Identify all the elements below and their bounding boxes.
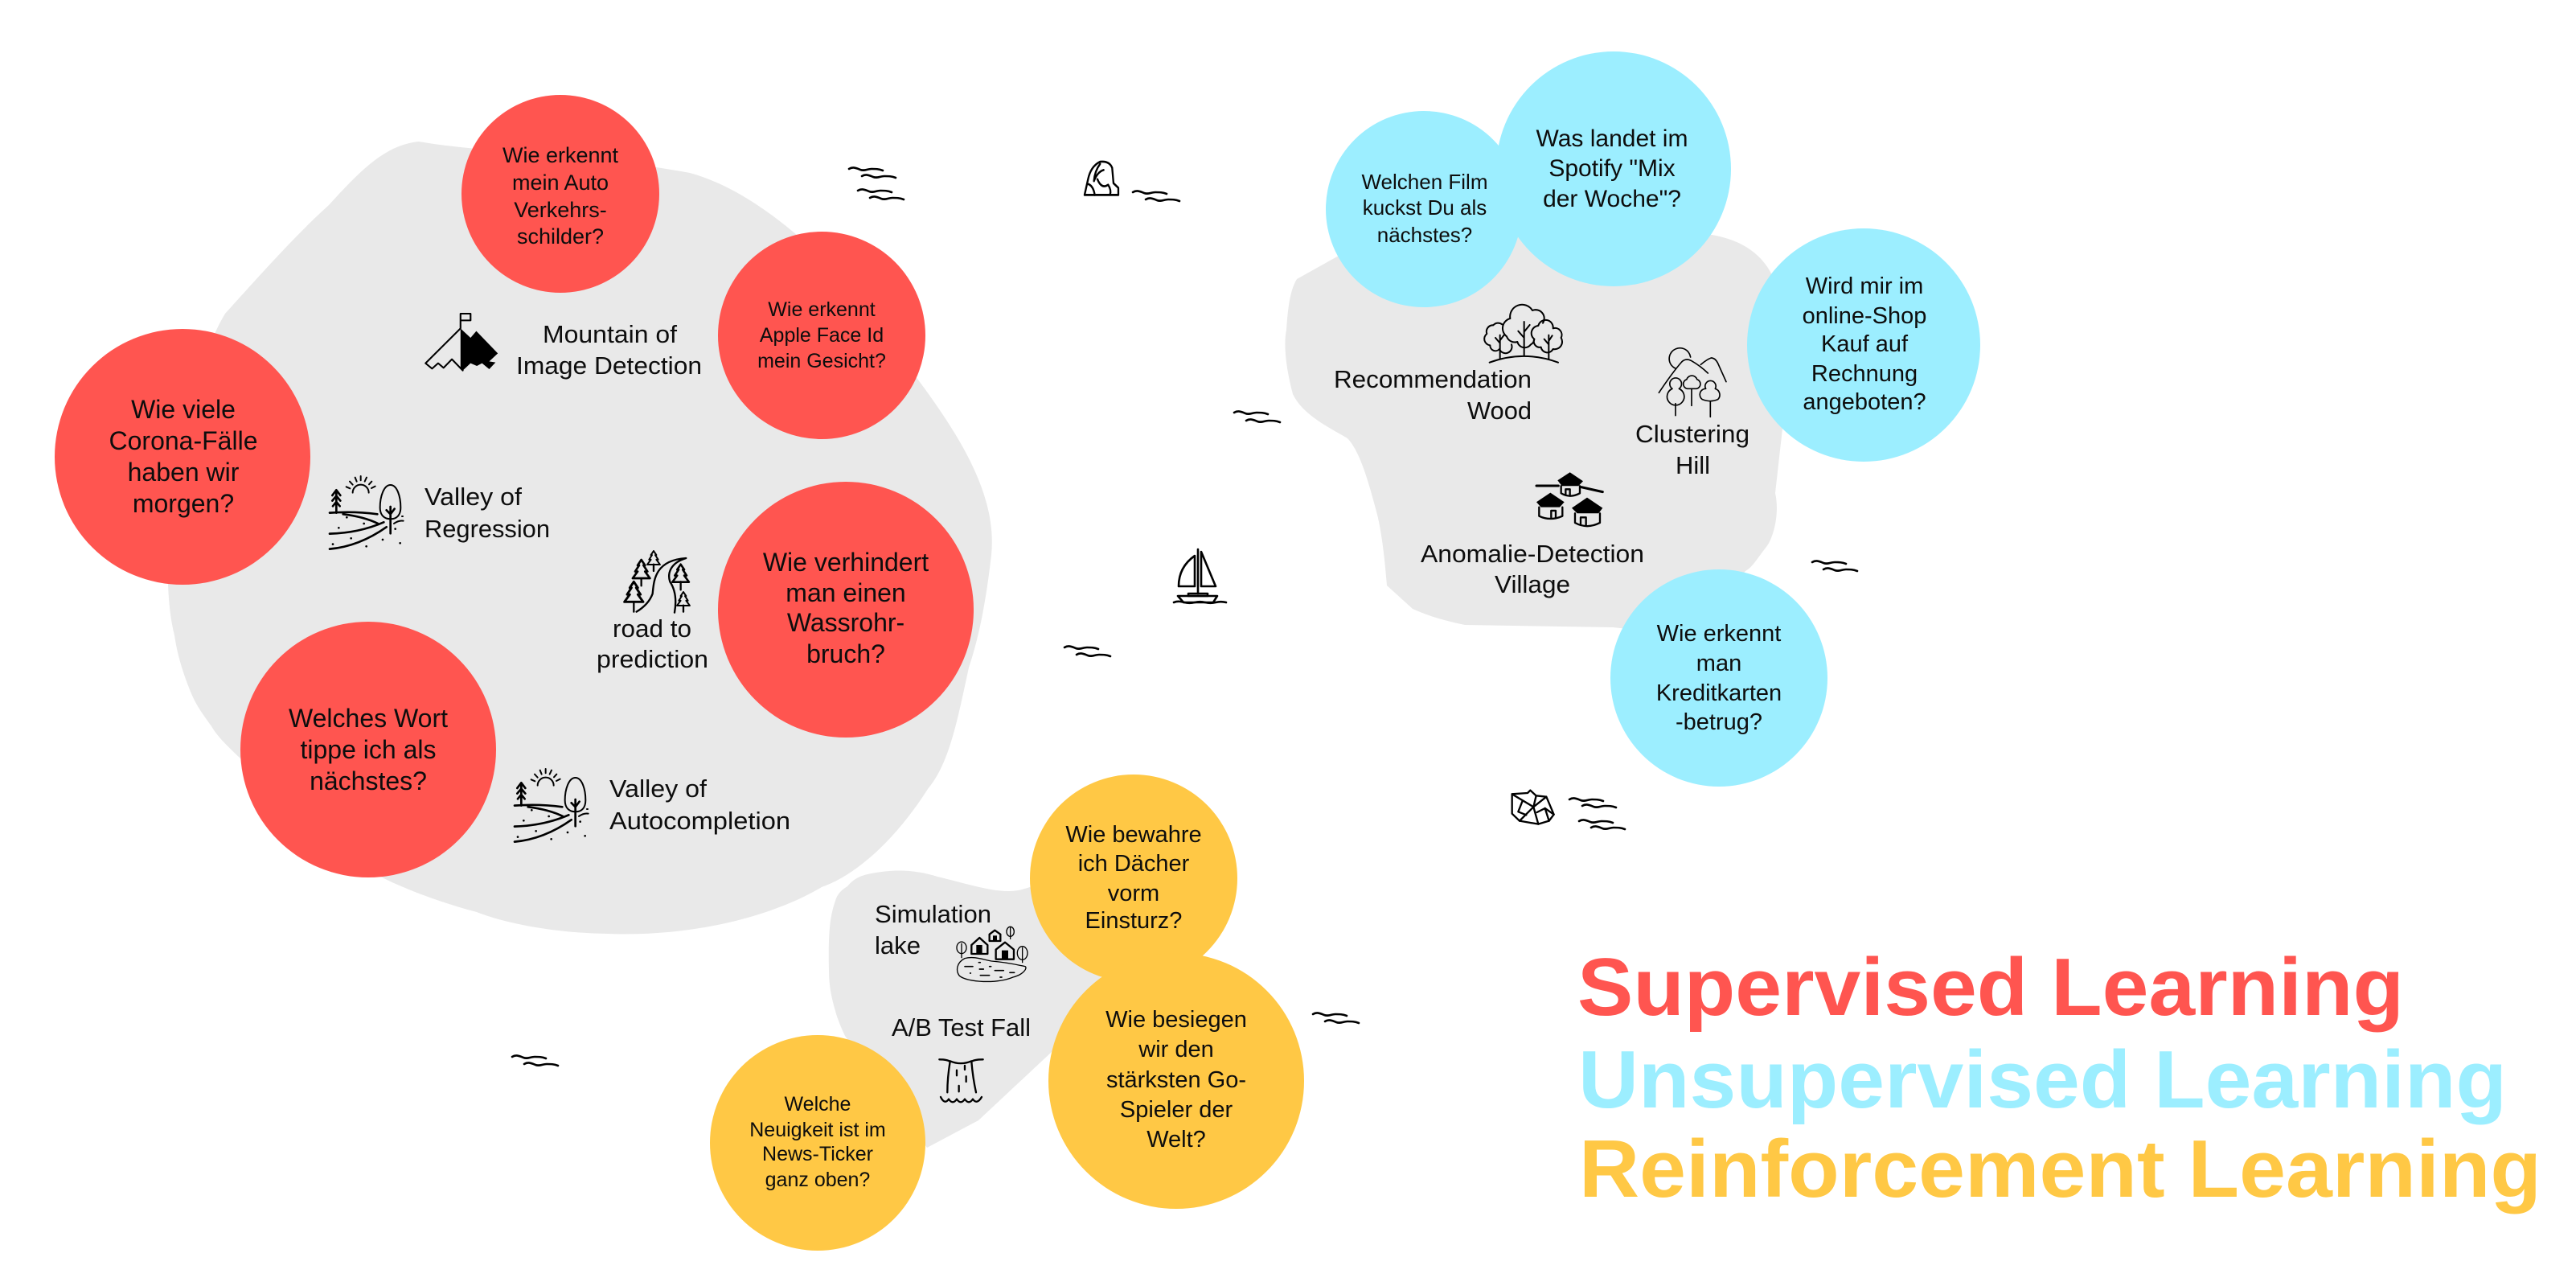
icon: mountain with flag xyxy=(425,314,498,371)
question: purchase on account: angeboten? xyxy=(1803,389,1926,415)
label: road to prediction: road to xyxy=(613,614,691,643)
question: traffic signs: Wie erkennt xyxy=(502,143,619,167)
icon: sailing boat xyxy=(1174,549,1226,603)
question: roofs collapse: vorm xyxy=(1108,881,1159,906)
label: recommendation wood: Wood xyxy=(1467,397,1532,425)
icon: wood xyxy=(1484,305,1562,363)
label: anomalie-detection village: Village xyxy=(1495,570,1570,598)
icon: valley of regression xyxy=(330,476,404,549)
icon: sea rock north xyxy=(1085,162,1118,195)
question: traffic signs: Verkehrs- xyxy=(514,198,607,222)
label: mountain of image detection: Mountain of xyxy=(543,320,677,348)
question: news ticker: Welche xyxy=(785,1093,851,1116)
question: roofs collapse: Einsturz? xyxy=(1085,908,1182,934)
label: valley of regression: Valley of xyxy=(425,483,522,511)
label: road to prediction xyxy=(597,614,708,673)
question: purchase on account: Kauf auf xyxy=(1821,331,1909,357)
waves: centre upper xyxy=(1234,411,1280,422)
icon: valley of autocompletion xyxy=(515,769,589,842)
question: traffic signs: mein Auto xyxy=(512,171,609,195)
waves: south xyxy=(1313,1013,1359,1023)
question: water pipe break: Wassrohr- xyxy=(787,608,904,637)
question: go player: Welt? xyxy=(1146,1127,1206,1153)
label: valley of autocompletion: Valley of xyxy=(609,775,707,803)
island: unsupervised learning xyxy=(1285,209,1785,635)
question: spotify mix: Spotify "Mix xyxy=(1548,155,1676,182)
question: credit card fraud: Wie erkennt xyxy=(1657,621,1781,647)
question: purchase on account: Rechnung xyxy=(1811,361,1918,387)
icon: sea rock south-east xyxy=(1512,791,1554,824)
question: face id: Wie erkennt xyxy=(768,298,876,321)
question: next word: nächstes? xyxy=(310,766,427,795)
label: clustering hill xyxy=(1635,420,1749,479)
question: next film: nächstes? xyxy=(1377,223,1472,247)
icon: hill with trees xyxy=(1659,348,1726,417)
question: next film xyxy=(1326,111,1522,307)
question: next word: tippe ich als xyxy=(301,735,436,764)
label: clustering hill: Clustering xyxy=(1635,420,1749,448)
question: go player: wir den xyxy=(1138,1037,1214,1062)
question: next word: Welches Wort xyxy=(289,704,448,733)
label: a/b test fall: A/B Test Fall xyxy=(892,1013,1031,1042)
question: go player: Spieler der xyxy=(1120,1097,1233,1123)
label: valley of regression xyxy=(425,483,550,543)
label: valley of autocompletion: Autocompletion xyxy=(609,807,790,835)
label: clustering hill: Hill xyxy=(1676,451,1710,479)
label: simulation lake xyxy=(875,900,991,959)
question: credit card fraud: -betrug? xyxy=(1676,709,1762,735)
question: corona cases xyxy=(55,329,310,585)
label: recommendation wood: Recommendation xyxy=(1334,365,1532,393)
question: water pipe break: man einen xyxy=(786,578,906,607)
question: roofs collapse: ich Dächer xyxy=(1078,851,1190,877)
question: go player: Wie besiegen xyxy=(1105,1007,1247,1033)
label: mountain of image detection xyxy=(516,320,702,380)
question: face id: mein Gesicht? xyxy=(757,350,886,372)
question: roofs collapse xyxy=(1030,775,1237,982)
question: next film: Welchen Film xyxy=(1361,170,1488,194)
label: road to prediction: prediction xyxy=(597,645,708,673)
waves: north xyxy=(1133,191,1179,201)
label: anomalie-detection village xyxy=(1421,540,1644,598)
label: mountain of image detection: Image Detection xyxy=(516,351,702,380)
question: next film: kuckst Du als xyxy=(1363,195,1487,220)
question: news ticker: ganz oben? xyxy=(765,1169,870,1191)
question: water pipe break: Wie verhindert xyxy=(763,548,929,577)
question: face id: Apple Face Id xyxy=(760,324,884,347)
label: valley of regression: Regression xyxy=(425,515,550,543)
question: spotify mix: der Woche"? xyxy=(1543,186,1681,212)
waves: north-west xyxy=(849,167,904,199)
question: news ticker: News-Ticker xyxy=(762,1143,873,1165)
waves: south-west xyxy=(512,1055,558,1066)
label: valley of autocompletion xyxy=(609,775,790,835)
question: roofs collapse: Wie bewahre xyxy=(1065,822,1202,848)
question: traffic signs xyxy=(461,95,659,293)
icon: waterfall xyxy=(939,1059,983,1102)
island: supervised learning xyxy=(168,142,992,934)
question: news ticker xyxy=(710,1035,925,1251)
legend: Unsupervised Learning xyxy=(1578,1035,2507,1125)
label: anomalie-detection village: Anomalie-Detection xyxy=(1421,540,1644,568)
question: next word xyxy=(240,622,496,877)
question: spotify mix: Was landet im xyxy=(1536,125,1688,152)
question: purchase on account: online-Shop xyxy=(1803,303,1926,329)
question: face id xyxy=(718,232,925,439)
question: water pipe break xyxy=(718,482,974,738)
island: reinforcement learning xyxy=(829,871,1101,1148)
question: corona cases: Wie viele xyxy=(131,395,236,424)
label: recommendation wood xyxy=(1334,365,1532,425)
waves: south-east xyxy=(1569,798,1625,829)
question: news ticker: Neuigkeit ist im xyxy=(749,1119,886,1141)
question: corona cases: morgen? xyxy=(133,489,234,518)
waves: east xyxy=(1812,561,1857,571)
label: simulation lake: Simulation xyxy=(875,900,991,928)
legend: Reinforcement Learning xyxy=(1579,1124,2541,1214)
label: simulation lake: lake xyxy=(875,931,921,959)
question: go player: stärksten Go- xyxy=(1106,1067,1246,1093)
legend xyxy=(1577,943,2541,1214)
question: water pipe break: bruch? xyxy=(806,639,885,668)
icon: village huts xyxy=(1536,472,1602,526)
question: corona cases: haben wir xyxy=(128,458,240,487)
icon: lake with houses xyxy=(957,927,1028,981)
question: traffic signs: schilder? xyxy=(517,224,604,249)
icon: road through forest xyxy=(625,551,690,613)
question: go player xyxy=(1048,953,1304,1209)
question: corona cases: Corona-Fälle xyxy=(109,426,257,455)
question: spotify mix xyxy=(1496,51,1731,286)
question: purchase on account xyxy=(1747,228,1980,462)
question: credit card fraud: Kreditkarten xyxy=(1656,680,1782,706)
legend: Supervised Learning xyxy=(1577,943,2404,1033)
question: credit card fraud xyxy=(1610,569,1827,787)
waves: centre lower xyxy=(1064,646,1110,656)
question: credit card fraud: man xyxy=(1696,651,1741,676)
question: purchase on account: Wird mir im xyxy=(1806,273,1923,299)
